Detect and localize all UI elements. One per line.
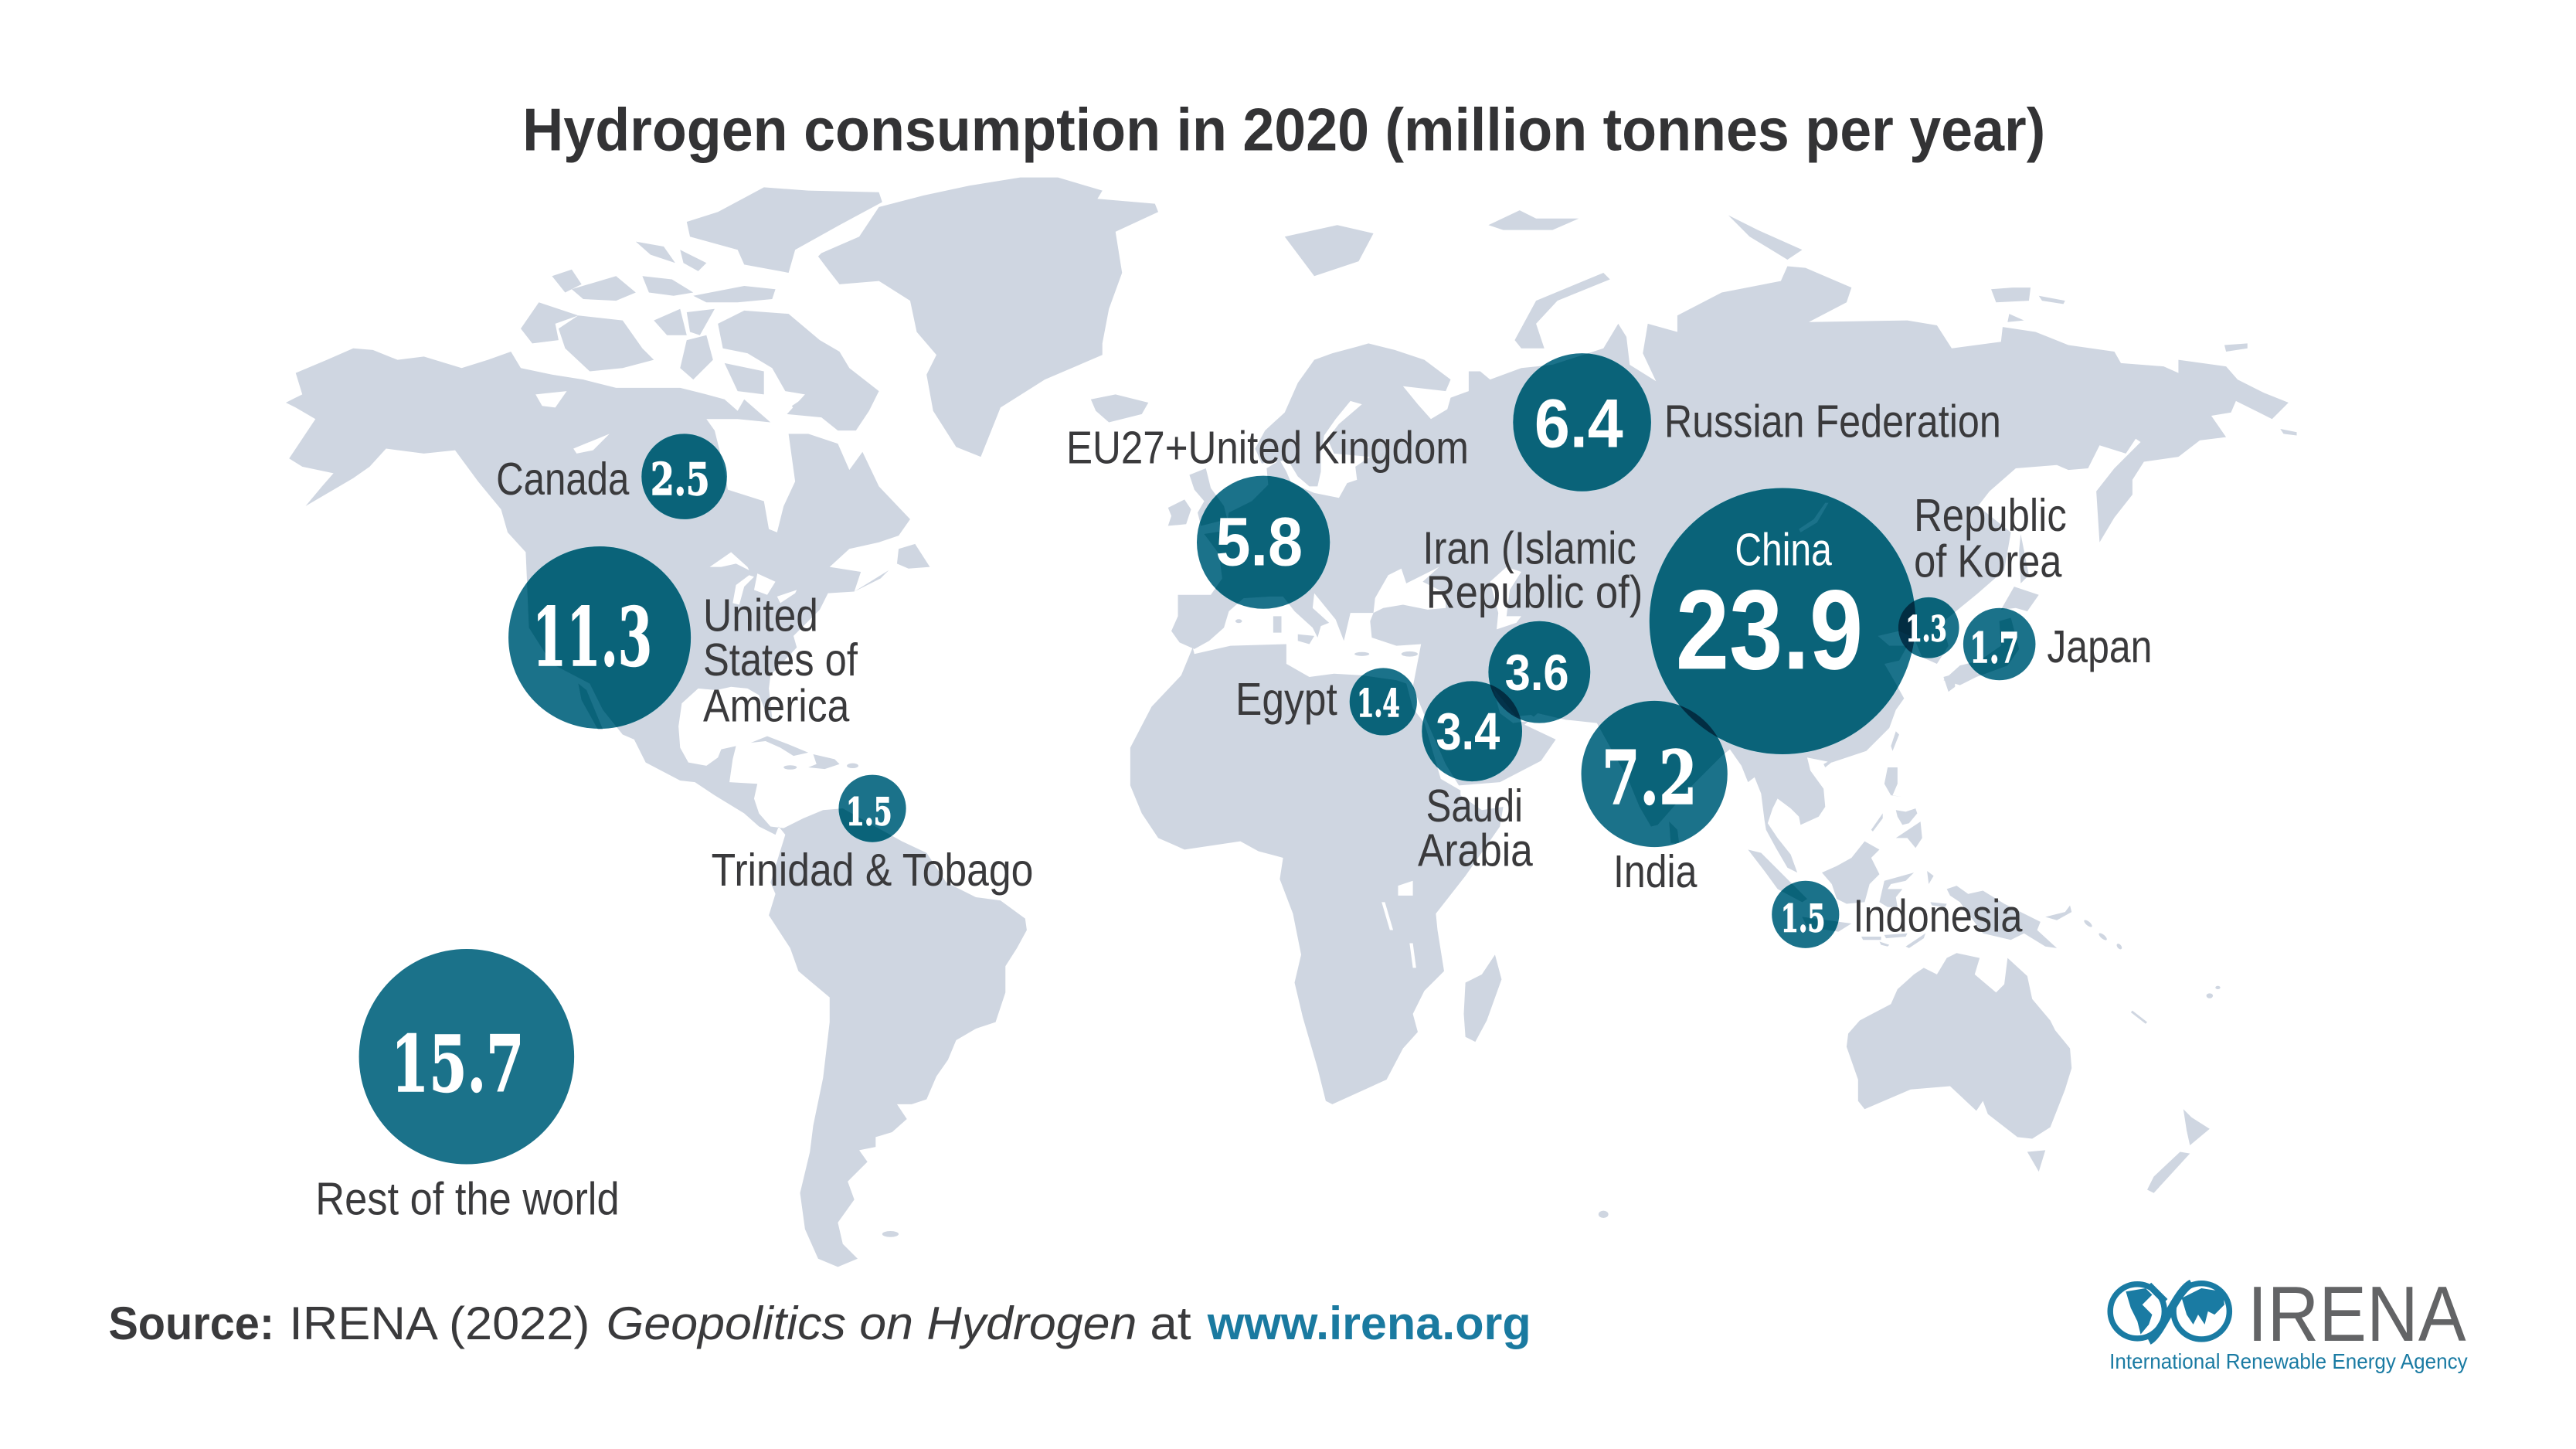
- landmass: Mediterranean islands: [1235, 616, 1418, 657]
- bubble: Japan: [1963, 608, 2035, 680]
- bubble: Egypt: 1.4: [1357, 681, 1400, 726]
- Lake Baikal: [1799, 503, 1829, 532]
- bubble: Russian Federation: 6.4: [1534, 384, 1623, 461]
- bubble: Trinidad and Tobago: 1.5: [846, 789, 892, 834]
- landmass: Americas: [286, 349, 1027, 1267]
- label: Indonesia: Indonesia: [1853, 890, 2023, 942]
- bubble: India: [1582, 701, 1728, 847]
- title: Hydrogen consumption in 2020 (million tonnes per year): [522, 97, 2045, 164]
- landmass: Newfoundland: [897, 544, 929, 569]
- logo tagline: International Renewable Energy Agency: [2109, 1349, 2468, 1373]
- label: Rest of the world: Rest of the world: [315, 1172, 620, 1224]
- bubble: EU27+United Kingdom: [1197, 476, 1330, 609]
- label: Iran (Islamic Republic of): Iran (Islamic: [1422, 522, 1636, 573]
- landmass: Arctic Russia islands: [1285, 210, 2297, 435]
- landmass: Great Britain: [1189, 468, 1227, 526]
- landmass: Africa: [1130, 645, 1504, 1104]
- bubble: Iran: [1488, 621, 1590, 723]
- logo wordmark: IRENA: [2248, 1271, 2466, 1358]
- label: Russian Federation: Russian Federation: [1664, 396, 2001, 447]
- label: United States of America: States of: [703, 634, 858, 685]
- IRENA logo: [2109, 1271, 2468, 1373]
- Black Sea: [1374, 567, 1446, 613]
- bubble: Saudi Arabia: [1422, 681, 1522, 781]
- landmass: Tasmania: [2027, 1150, 2045, 1172]
- bubble: Republic of Korea: 1.3: [1905, 608, 1947, 649]
- landmass: Ireland: [1168, 499, 1191, 526]
- bubble: Russian Federation: [1513, 353, 1651, 492]
- source line: Source:: [108, 1297, 274, 1349]
- bubble: Indonesia: [1772, 881, 1839, 948]
- bubble: Saudi Arabia: 3.4: [1436, 702, 1500, 761]
- label: Republic of Korea: [1914, 489, 2067, 587]
- label: Egypt: Egypt: [1235, 673, 1337, 725]
- bubble: China: [1650, 488, 1915, 754]
- bubble: United States of America: 11.3: [532, 590, 652, 685]
- landmass: Baffin Island: [718, 311, 879, 430]
- bubble: Republic of Korea: [1898, 597, 1959, 658]
- label: EU27+United Kingdom: EU27+United Kingdom: [1066, 422, 1469, 474]
- Canadian lakes: [535, 391, 610, 454]
- icon: infinity globes: [2110, 1284, 2229, 1341]
- label: Republic of Korea: Republic: [1914, 489, 2067, 541]
- Great Lakes: [710, 552, 797, 604]
- inland seas and lakes: [535, 391, 1829, 968]
- label: United States of America: United: [703, 590, 818, 641]
- bubble: China: 23.9: [1676, 566, 1863, 693]
- bubble: Egypt: [1350, 668, 1417, 736]
- label: Canada: Canada: [496, 453, 630, 505]
- landmass: Baja California: [578, 684, 603, 730]
- bubble: EU27+United Kingdom: 5.8: [1215, 502, 1303, 580]
- landmass: Arctic islands: [552, 187, 882, 411]
- label: Trinidad and Tobago: Trinidad & Tobago: [712, 844, 1033, 896]
- landmass: Eurasia: [1171, 266, 2289, 872]
- label: Saudi Arabia: Saudi: [1426, 780, 1523, 832]
- African lakes: [1381, 881, 1416, 968]
- label: Japan: Japan: [2047, 621, 2152, 672]
- bubble: Japan: 1.7: [1969, 624, 2019, 672]
- bubble: China: China: [1735, 523, 1833, 575]
- landmass: Maritime Southeast Asia: [1748, 767, 2123, 951]
- bubble: Iran: 3.6: [1505, 644, 1569, 701]
- source line: [108, 1297, 1531, 1349]
- landmass: Greenland: [818, 178, 1158, 457]
- label: Saudi Arabia: [1418, 780, 1534, 876]
- world map: [286, 178, 2297, 1267]
- landmass: Japan, Taiwan and nearby islands: [1669, 534, 2039, 843]
- source line: IRENA (2022): [289, 1297, 590, 1349]
- source line: Geopolitics on Hydrogen: [607, 1297, 1137, 1349]
- landmass: Madagascar: [1464, 954, 1501, 1042]
- label: Iran (Islamic Republic of): Republic of): [1426, 566, 1643, 618]
- landmass: Banks Island: [521, 302, 578, 343]
- label: United States of America: [703, 590, 858, 731]
- landmass: New Zealand: [2147, 1109, 2210, 1193]
- bubble: Indonesia: 1.5: [1781, 896, 1825, 941]
- label: India: India: [1613, 845, 1698, 897]
- land tint under the bubbles: [527, 354, 2019, 931]
- bubble: Rest of the world: [359, 949, 574, 1165]
- bubble: Rest of the world: 15.7: [391, 1019, 524, 1110]
- landmass: Australia: [1847, 953, 2071, 1139]
- bubble: United States of America: [508, 546, 691, 729]
- label: Saudi Arabia: Arabia: [1418, 825, 1534, 876]
- Persian Gulf: [1494, 689, 1538, 723]
- bubble: Canada: [641, 434, 727, 519]
- bubble: Canada: 2.5: [651, 453, 710, 505]
- label: Iran (Islamic Republic of): [1422, 522, 1643, 618]
- bubble: India: 7.2: [1602, 734, 1697, 821]
- source line: at: [1150, 1297, 1191, 1349]
- landmass: Victoria Island: [559, 315, 654, 372]
- label: United States of America: America: [703, 679, 850, 731]
- landmass: small Pacific and Atlantic islands: [882, 986, 2221, 1237]
- landmass: Caribbean islands: [751, 736, 858, 770]
- Caspian Sea: [1490, 567, 1521, 629]
- landmass: Iceland: [1091, 394, 1148, 422]
- label: Republic of Korea: of Korea: [1914, 535, 2062, 587]
- source line: www.irena.org: [1207, 1297, 1531, 1349]
- bubble: Trinidad and Tobago: [838, 775, 906, 842]
